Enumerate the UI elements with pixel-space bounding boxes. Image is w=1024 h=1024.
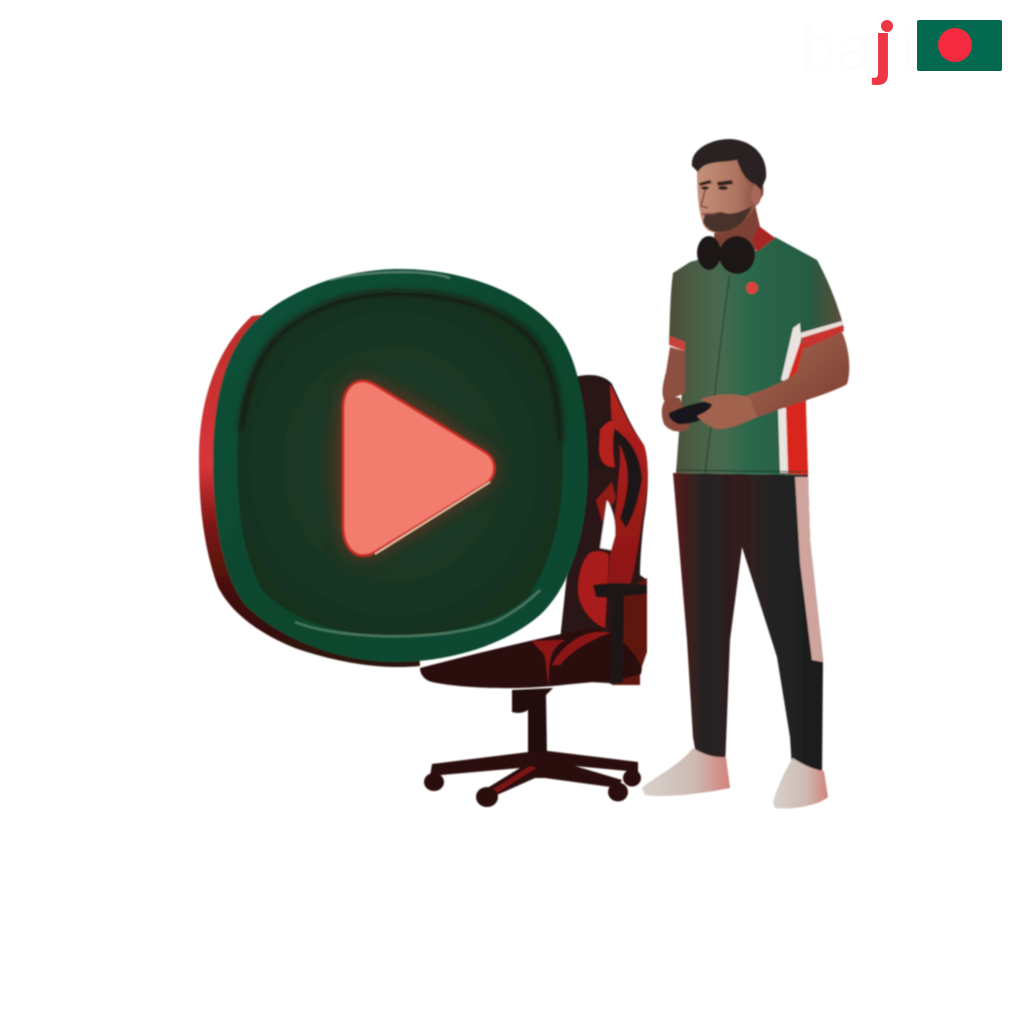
badge lower rim highlight [295, 590, 540, 636]
nose and mouth [701, 190, 716, 214]
chair back opening [600, 500, 615, 550]
play triangle edge highlight [375, 482, 490, 554]
badge rim highlight [330, 272, 450, 280]
trouser stripe [795, 477, 823, 662]
chair armrest [593, 583, 647, 684]
chair back dark stripe [613, 428, 642, 528]
chair headrest red pad [599, 420, 617, 467]
gamer figure [642, 139, 849, 809]
chair gas lift [512, 688, 553, 755]
jersey white stripes [778, 323, 801, 473]
chair back red side panel [607, 384, 648, 592]
jersey [669, 237, 844, 475]
collar [752, 226, 775, 252]
jersey side panel [780, 340, 808, 475]
left hand [662, 397, 690, 431]
chair base red highlight [490, 766, 536, 795]
right arm [745, 332, 849, 418]
chair back [420, 375, 648, 685]
chair back red inner strip [596, 482, 616, 522]
gripping hand [697, 394, 757, 429]
logo faint i: i [900, 12, 914, 84]
chair lower side [612, 578, 647, 685]
game controller [669, 401, 720, 424]
neck [712, 205, 762, 262]
gaming chair [420, 375, 648, 807]
beard shadow [703, 206, 752, 232]
jersey hem [676, 470, 808, 472]
logo faint letters: ba [800, 12, 873, 84]
play badge [199, 269, 588, 667]
headphones [697, 236, 755, 274]
chair seat [420, 628, 642, 688]
badge green rim [213, 269, 588, 662]
Bangladesh flag [917, 20, 1002, 71]
chair headrest cushion [589, 420, 617, 470]
logo red j: j [871, 6, 893, 86]
flag field [917, 20, 1002, 71]
play triangle glow [343, 381, 494, 556]
play triangle [343, 381, 494, 556]
flag disc [938, 28, 972, 62]
badge inner face [237, 292, 563, 636]
chair lumbar cushion [578, 551, 609, 628]
left shoe [642, 748, 730, 796]
baji logo [872, 20, 893, 85]
badge red side and shadow [199, 300, 420, 667]
trousers [673, 473, 823, 776]
jersey right cuff [801, 322, 844, 349]
hair [692, 139, 766, 190]
jersey badge [746, 282, 758, 294]
jersey left cuff [669, 336, 685, 351]
badge top inner shadow [240, 292, 562, 440]
chair seat red trim [532, 632, 610, 686]
jersey zip line [705, 275, 730, 473]
left arm [662, 347, 685, 402]
ear [751, 185, 761, 205]
cuff white band [800, 321, 843, 338]
chair casters [424, 770, 641, 807]
illustration stage [198, 20, 1002, 810]
chair star base [430, 751, 638, 798]
right shoe [773, 758, 828, 809]
face [697, 155, 763, 233]
eyes and brows [699, 180, 733, 190]
